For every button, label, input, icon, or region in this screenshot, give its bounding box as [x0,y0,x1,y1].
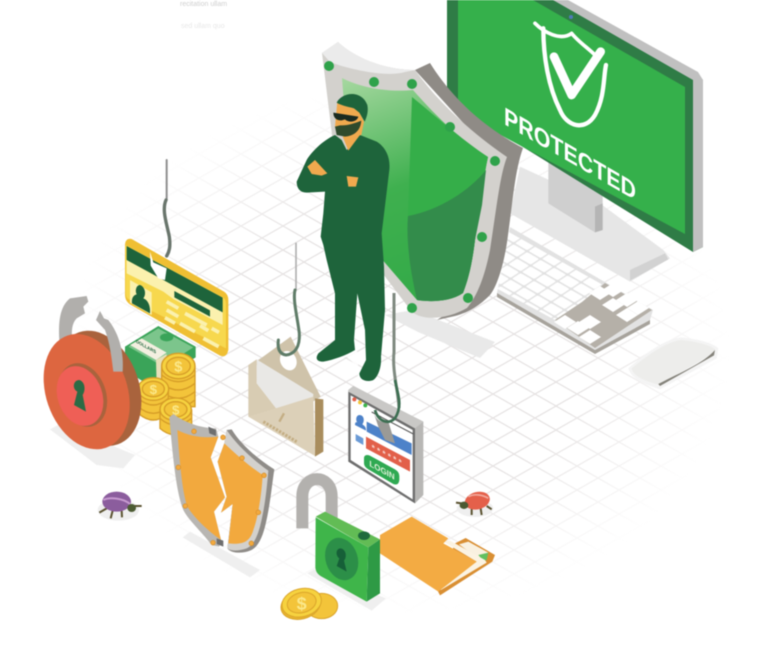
password field [366,437,410,472]
gold coins [278,584,338,623]
monitor [447,0,703,282]
login button [364,455,399,484]
security man [297,94,390,385]
broken shield [169,414,274,577]
shield logo on screen [535,23,606,125]
keyboard [494,227,653,354]
padlock shadow [307,569,386,611]
padlock front [315,517,368,602]
floor grid [131,142,667,574]
hair [337,94,368,122]
coin stack back: $ [174,359,182,375]
money stack [125,326,196,390]
money stack: DOLLARS [136,339,157,356]
folder paper [438,541,487,590]
neck [343,133,362,151]
card torn hole [150,252,167,280]
gold coins: $ [297,593,307,613]
broken lock [29,296,156,468]
folder front [380,517,477,592]
monitor screen [458,0,685,234]
padlock keyhole [320,533,364,585]
coin stack left: $ [150,382,158,397]
browser dots [352,397,356,401]
left shard [169,414,225,547]
shoe outlines [312,340,377,385]
lock shadow [50,424,135,468]
card text lines [165,302,219,347]
username field [367,422,412,455]
man body [297,135,390,381]
card photo [130,280,152,315]
face [335,102,364,138]
protected label: PROTECTED [504,102,636,206]
padlock side [367,539,380,602]
purple bug [98,492,142,521]
user icon [355,415,366,431]
coin stack front: $ [172,402,180,417]
shield bright panel [407,97,488,301]
faint top text [180,1,227,30]
hook tip [373,412,395,443]
padlock top [316,512,380,547]
hook left over id card [164,160,170,256]
red bug [456,489,493,517]
shield rim [322,42,507,318]
shield rivets [324,61,500,313]
folder [380,517,495,595]
mouse [628,337,718,389]
broken shield shadow [183,532,260,577]
card pale panel [127,260,223,325]
numeric block [555,283,652,348]
coin stacks [138,353,195,435]
broken shackle left [59,296,88,340]
monitor stand [510,160,670,282]
man head [333,94,368,151]
padlock shackle [302,479,332,528]
login window [348,380,423,503]
card data bars [174,291,210,317]
lock inner ring [50,357,115,433]
folder back tab [437,538,495,595]
shield side [415,63,523,320]
shield floor shadow [385,310,495,358]
webcam [569,15,573,19]
green padlock [302,479,386,611]
folder green tab [478,553,488,561]
window title rule [372,412,413,434]
login hook line [394,293,399,408]
right shard [218,429,274,553]
lock keyhole [74,380,86,412]
large green shield [322,42,523,320]
hook over envelope [293,243,298,290]
login window: ****** [372,442,402,468]
broken shackle right [96,311,123,372]
login window: LOGIN [369,459,395,482]
broken shield rivets [176,429,266,546]
small lock icon [356,434,363,445]
id card [125,239,228,356]
sunglasses [333,113,358,122]
lock side [41,319,156,458]
card dark band [127,246,223,312]
envelope letter [257,359,313,413]
shield dark panel [407,170,486,301]
man hands [307,160,327,176]
beard [335,121,361,137]
monitor frame [447,0,703,252]
envelope [248,290,323,457]
faint top text: sed ullam quo [181,23,225,30]
shield corner brackets [208,427,216,436]
lock front [29,322,144,461]
envelope hook hole [277,348,300,373]
faint top text: recitation ullam [180,1,227,8]
